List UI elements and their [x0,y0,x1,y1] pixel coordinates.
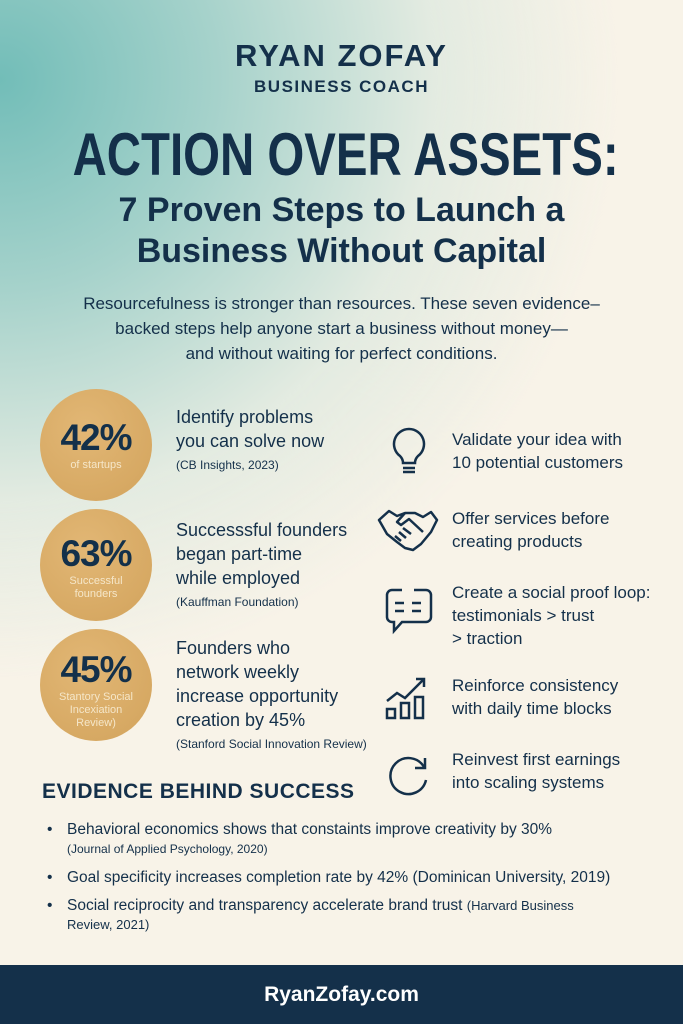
step text 4: with daily time blocks [452,699,612,718]
title: ACTION OVER ASSETS: [73,121,619,188]
step text 2: creating products [452,532,582,551]
bullet 3: Review, 2021) [67,917,149,932]
evidence heading: EVIDENCE BEHIND SUCCESS [42,780,355,803]
stat text 2: Successsful founders [176,520,347,540]
stat text 1: (CB Insights, 2023) [176,458,279,472]
step text 3: Create a social proof loop: [452,583,650,602]
stat circle 42% [40,389,152,501]
subtitle: Business Without Capital [137,232,546,270]
step text 1 [452,430,623,472]
stat circle 42%: of startups [70,459,122,471]
icon: chat bubble [386,588,432,634]
intro paragraph: and without waiting for perfect conditions. [186,344,497,363]
icon: cycle arrow [389,756,428,796]
step text 3 [452,583,650,648]
step text 5: into scaling systems [452,773,604,792]
subtitle: 7 Proven Steps to Launch a [119,191,564,229]
stat text 3: creation by 45% [176,710,305,730]
step text 5 [452,750,620,792]
intro paragraph: backed steps help anyone start a business without money— [115,319,568,338]
bullet 1: Behavioral economics shows that constaints improve creativity by 30% [67,821,552,838]
icon: handshake [378,510,438,552]
bullet 1 [47,821,552,856]
stat circle 42%: 42% [60,417,132,458]
step text 4 [452,676,618,718]
stat circle 45%: Stantory Social [59,691,133,703]
header name: RYAN ZOFAY [235,38,448,73]
icon: lightbulb [392,428,426,474]
bullet 2: Goal specificity increases completion rate by 42% (Dominican University, 2019) [67,869,610,886]
step text 3: testimonials > trust [452,606,594,625]
stat circle 45%: Review) [76,717,116,729]
bullet 3: • [47,897,52,914]
stat circle 45% [40,629,152,741]
bullet 1: • [47,821,52,838]
stat text 3: Founders who [176,638,290,658]
stat text 2: while employed [176,568,300,588]
step text 1: 10 potential customers [452,453,623,472]
stat text 2: began part-time [176,544,302,564]
evidence bullets [47,821,610,932]
bullet 2: • [47,869,52,886]
stat circle 63%: founders [75,588,117,600]
stat circle 63%: 63% [60,533,132,574]
stat text 3 [176,638,367,751]
bullet 3: Social reciprocity and transparency accelerate brand trust (Harvard Business [67,897,574,914]
footer [0,965,683,1024]
stat text 1: Identify problems [176,407,313,427]
header role: BUSINESS COACH [254,77,429,96]
intro paragraph: Resourcefulness is stronger than resources. These seven evidence– [83,294,600,313]
stat circle 63%: Successful [69,575,123,587]
stat circle 63% [40,509,152,621]
step text 2 [452,509,609,551]
stat text 3: network weekly [176,662,299,682]
stat circle 45%: 45% [60,649,132,690]
footer: RyanZofay.com [264,983,419,1006]
stat text 1 [176,407,324,472]
step text 1: Validate your idea with [452,430,622,449]
bullet 3 [47,897,574,932]
stat text 1: you can solve now [176,431,324,451]
step text 5: Reinvest first earnings [452,750,620,769]
step text 2: Offer services before [452,509,609,528]
step text 3: > traction [452,629,522,648]
stat circle 45%: Incexiation [70,704,122,716]
stat text 3: increase opportunity [176,686,338,706]
subtitle [119,191,565,270]
stat text 2 [176,520,347,609]
intro paragraph [83,294,600,363]
stat text 3: (Stanford Social Innovation Review) [176,737,367,751]
stat text 2: (Kauffman Foundation) [176,595,299,609]
icon: growth chart [386,678,426,720]
bullet 1: (Journal of Applied Psychology, 2020) [67,842,268,856]
step text 4: Reinforce consistency [452,676,618,695]
